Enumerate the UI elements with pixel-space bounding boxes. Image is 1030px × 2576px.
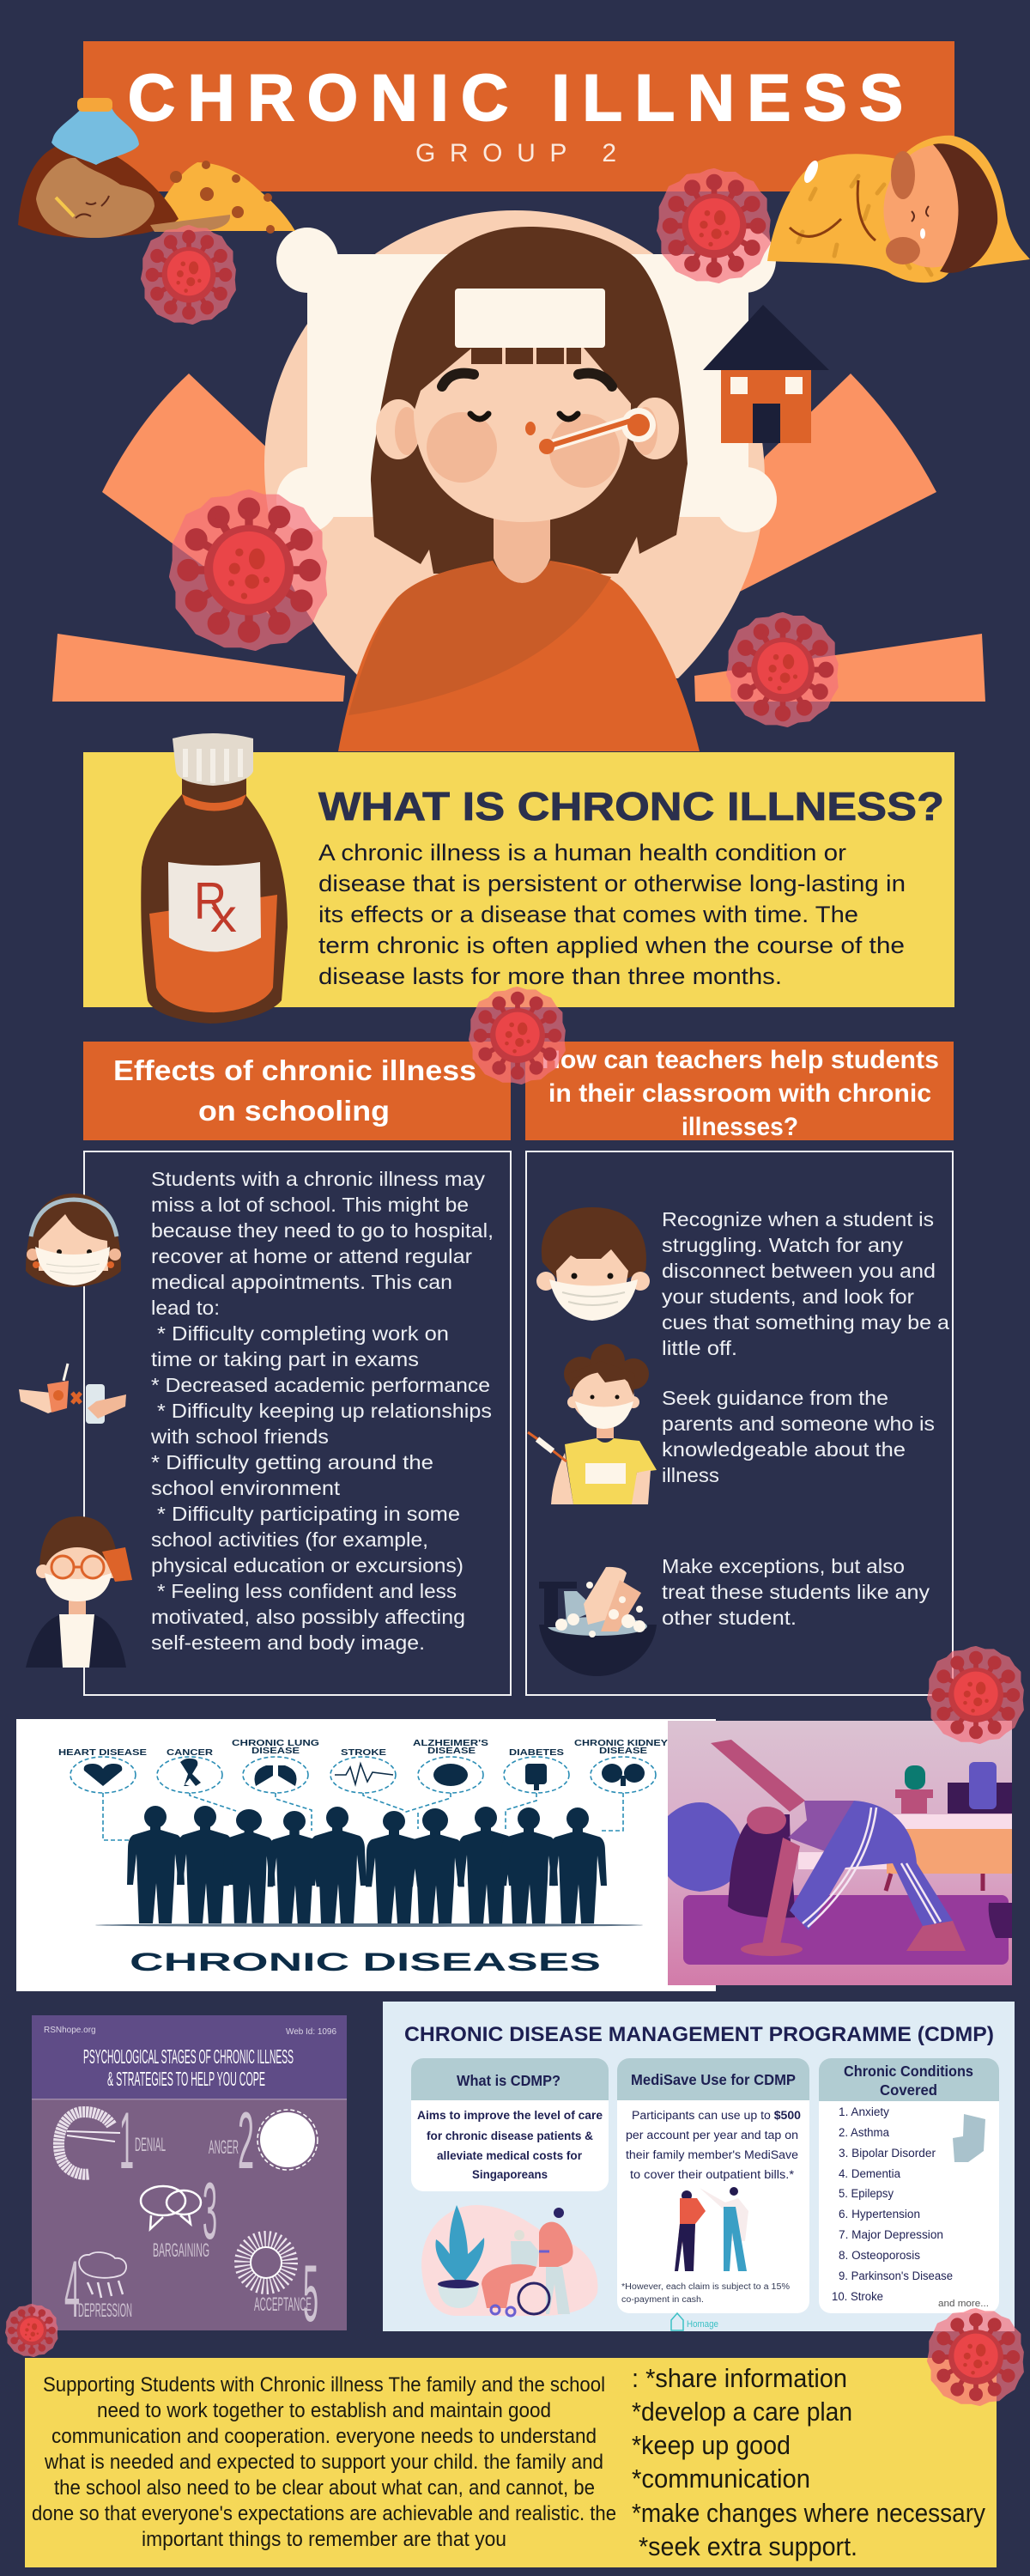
panel: effects text xyxy=(84,1151,511,1695)
card: MediSave use: *However, each claim is subject to a 15% xyxy=(621,2282,790,2292)
panel: effects text: * Difficulty keeping up relationships xyxy=(157,1400,492,1422)
stage numerals: 4 xyxy=(64,2244,80,2334)
heading: WHAT IS CHRONC ILLNESS? xyxy=(318,784,944,829)
stage numerals: 3 xyxy=(203,2166,217,2256)
heading: effects on schooling: Effects of chronic illness xyxy=(113,1054,476,1086)
card: chronic conditions covered: 7. Major Depression xyxy=(839,2228,943,2241)
panel: effects text: * Difficulty completing work on xyxy=(157,1322,449,1345)
disease labels: ALZHEIMER'S xyxy=(413,1738,488,1748)
card: MediSave use: Participants can use up to $500 xyxy=(632,2109,801,2122)
heading: how can teachers help: How can teachers help students xyxy=(542,1046,939,1074)
panel: effects text: lead to: xyxy=(151,1297,220,1319)
icon: child under blanket xyxy=(767,135,1030,283)
supporting text xyxy=(32,2373,616,2551)
illustration: psychological stages of chronic illness xyxy=(32,2015,347,2338)
panel: effects text: school environment xyxy=(151,1477,341,1499)
card: chronic conditions covered: 1. Anxiety xyxy=(839,2105,889,2118)
definition text: term chronic is often applied when the course of the xyxy=(318,933,905,958)
heading: how can teachers help: in their classroom with chronic xyxy=(548,1079,931,1108)
heading: effects on schooling xyxy=(83,1042,511,1140)
card: MediSave use: co-payment in cash. xyxy=(621,2295,704,2305)
panel: effects text: recover at home or attend regular xyxy=(151,1245,472,1267)
supporting text: communication and cooperation. everyone needs to understand xyxy=(52,2425,597,2448)
illustration: nurse with wheelchair and plant xyxy=(421,2205,598,2316)
face xyxy=(36,158,154,238)
panel: effects text: medical appointments. This can xyxy=(151,1271,452,1293)
panel: effects text: * Decreased academic performance xyxy=(151,1374,490,1396)
panel: teachers text: Recognize when a student is xyxy=(662,1208,934,1230)
card: chronic conditions covered: Covered xyxy=(880,2081,937,2099)
forehead cooling pad xyxy=(455,289,605,348)
hair xyxy=(371,227,688,574)
pillow back xyxy=(264,210,765,678)
panel: effects text: school activities (for example, xyxy=(151,1528,428,1551)
ears xyxy=(376,398,679,459)
source labels: RSNhope.org xyxy=(44,2026,96,2035)
stage names: BARGAINING xyxy=(153,2239,209,2261)
panel: effects text: * Difficulty getting around the xyxy=(151,1451,433,1473)
panel: teachers text: little off. xyxy=(662,1337,737,1359)
icon: sick child with ice bag xyxy=(18,98,295,238)
illustration: psychological stages of chronic illness: & STRATEGIES TO HELP YOU COPE xyxy=(107,2068,265,2090)
thermometer xyxy=(539,408,656,454)
cheeks xyxy=(427,412,620,488)
card: what is CDMP: What is CDMP? xyxy=(457,2072,560,2089)
supporting text: Supporting Students with Chronic illness The family and the school xyxy=(43,2373,605,2397)
illustration: psychological stages of chronic illness: 5 xyxy=(303,2248,318,2338)
subtitle: GROUP 2 xyxy=(415,139,616,167)
card: what is CDMP xyxy=(411,2058,609,2191)
hair xyxy=(18,142,179,238)
card: chronic conditions covered xyxy=(819,2058,999,2313)
illustration: yoga stretch xyxy=(668,1721,1012,1985)
panel: effects text: with school friends xyxy=(150,1425,329,1448)
icon: hand washing xyxy=(539,1567,657,1676)
panel: chronic disease management programme xyxy=(383,2002,1015,2331)
disease labels xyxy=(58,1738,668,1758)
body shadow xyxy=(348,561,611,715)
illustration: psychological stages of chronic illness: PSYCHOLOGICAL STAGES OF CHRONIC ILLNESS xyxy=(83,2045,294,2068)
disease labels: CHRONIC KIDNEY xyxy=(574,1738,668,1748)
panel: effects text: because they need to go to hospital, xyxy=(151,1219,494,1242)
things to remember list xyxy=(632,2363,985,2561)
card: MediSave use xyxy=(617,2058,809,2313)
card: MediSave use: their family member's MediSave xyxy=(626,2148,798,2161)
icon: sun xyxy=(243,2239,289,2286)
panel: teachers text: knowledgeable about the xyxy=(662,1438,906,1461)
stage names: DENIAL xyxy=(135,2134,166,2155)
panel: what is chronic illness xyxy=(83,752,954,1007)
disease labels: CHRONIC LUNG xyxy=(232,1738,319,1748)
card: MediSave use: per account per year and tap on xyxy=(626,2129,798,2142)
panel: chronic diseases image xyxy=(16,1719,716,1991)
supporting text: the school also need to be clear about what can, and cannot, be xyxy=(54,2476,595,2500)
illustration: patient and doctor xyxy=(675,2187,748,2271)
card: chronic conditions covered: and more... xyxy=(938,2299,989,2309)
stage numerals: 2 xyxy=(238,2095,254,2185)
card: chronic conditions covered: 3. Bipolar Disorder xyxy=(839,2147,936,2160)
panel: teachers text: your students, and look for xyxy=(662,1285,914,1308)
card: MediSave use: MediSave Use for CDMP xyxy=(631,2071,796,2088)
panel: effects text: time or taking part in exams xyxy=(151,1348,419,1370)
illustration: sick girl on a pillow xyxy=(52,210,985,751)
nose xyxy=(525,422,536,435)
panel: effects text: motivated, also possibly affecting xyxy=(151,1606,465,1628)
heading: how can teachers help xyxy=(525,1042,954,1141)
disease labels: CANCER xyxy=(167,1747,213,1758)
title: CHRONIC DISEASE MANAGEMENT PROGRAMME (CDMP) xyxy=(404,2023,994,2046)
card: chronic conditions covered: 4. Dementia xyxy=(839,2167,900,2180)
icon: house xyxy=(703,305,829,443)
card: chronic conditions covered: 2. Asthma xyxy=(839,2126,889,2139)
disease labels: STROKE xyxy=(341,1747,386,1758)
supporting text: done so that everyone's expectations are achievable and realistic. the xyxy=(32,2502,616,2525)
stage names: ANGER xyxy=(209,2136,239,2158)
icon: anger scribble xyxy=(258,2110,318,2170)
heading: effects on schooling: on schooling xyxy=(198,1095,390,1127)
eyes xyxy=(470,414,578,419)
definition text: disease that is persistent or otherwise long-lasting in xyxy=(318,871,906,896)
panel: effects text: self-esteem and body image. xyxy=(151,1631,425,1654)
things to remember list: *keep up good xyxy=(632,2430,791,2460)
icon: Rx bottle xyxy=(141,733,288,1024)
face xyxy=(414,348,631,522)
stage names xyxy=(78,2134,312,2321)
card: chronic conditions covered: 10. Stroke xyxy=(832,2290,883,2303)
panel: teachers text xyxy=(526,1151,953,1695)
card: what is CDMP: Aims to improve the level of care xyxy=(417,2109,603,2122)
panel: teachers text: parents and someone who is xyxy=(662,1413,935,1435)
card: chronic conditions covered: 9. Parkinson's Disease xyxy=(839,2269,953,2282)
definition text: its effects or a disease that comes with time. The xyxy=(318,902,858,927)
panel: teachers text: disconnect between you and xyxy=(662,1260,936,1282)
card: what is CDMP: alleviate medical costs for xyxy=(437,2149,583,2162)
card: MediSave use: to cover their outpatient bills.* xyxy=(630,2168,795,2181)
disease labels: DISEASE xyxy=(427,1746,476,1756)
logo: Homage: Homage xyxy=(687,2319,718,2330)
silhouettes of people xyxy=(95,1806,643,1927)
ice bag xyxy=(52,107,139,165)
title banner xyxy=(83,41,954,191)
definition text: A chronic illness is a human health condition or xyxy=(318,840,846,866)
supporting text: need to work together to establish and maintain good xyxy=(97,2399,551,2422)
things to remember list: *seek extra support. xyxy=(639,2531,857,2561)
panel: teachers text: illness xyxy=(662,1464,719,1486)
stage names: DEPRESSION xyxy=(78,2300,132,2321)
icon: boy with mask xyxy=(536,1207,650,1321)
things to remember list: : *share information xyxy=(632,2363,847,2393)
title: CHRONIC ILLNESS xyxy=(128,62,903,135)
panel: effects text: physical education or excursions) xyxy=(151,1554,464,1577)
icon: Rx bottle: x xyxy=(210,890,237,942)
stage numerals xyxy=(64,2095,318,2338)
sun rays xyxy=(52,374,985,702)
dashed circles and connectors xyxy=(70,1757,656,1840)
panel: teachers text: struggling. Watch for any xyxy=(662,1234,904,1256)
disease labels: DISEASE xyxy=(599,1746,647,1756)
eyebrows xyxy=(442,374,612,386)
image title: CHRONIC DISEASES xyxy=(130,1948,601,1977)
icon: hands sharing items xyxy=(19,1364,126,1424)
supporting text: important things to remember are that you xyxy=(142,2528,506,2551)
definition text xyxy=(318,840,906,989)
disease labels: DIABETES xyxy=(509,1747,564,1758)
panel: effects text: miss a lot of school. This might be xyxy=(151,1194,469,1216)
heading: how can teachers help: illnesses? xyxy=(682,1113,798,1141)
panel: teachers text: other student. xyxy=(662,1607,797,1629)
pillow xyxy=(276,228,777,532)
card: what is CDMP: Singaporeans xyxy=(472,2168,548,2181)
card: what is CDMP: for chronic disease patients & xyxy=(427,2129,593,2142)
illustration: psychological stages of chronic illness: Web Id: 1096 xyxy=(286,2027,336,2037)
neck xyxy=(494,515,550,584)
disease labels: HEART DISEASE xyxy=(58,1747,147,1758)
blanket xyxy=(148,162,295,231)
icon: inhaler xyxy=(953,2114,985,2162)
icon: speech bubbles xyxy=(141,2186,201,2229)
icon: Rx bottle: R xyxy=(194,872,227,930)
icon: boy with glasses xyxy=(26,1516,132,1668)
supporting text: what is needed and expected to support your child. the family and xyxy=(44,2451,603,2474)
panel: effects text: * Feeling less confident and less xyxy=(157,1580,457,1602)
panel: teachers text: Seek guidance from the xyxy=(662,1387,888,1409)
icon: blindfolded head xyxy=(58,2112,120,2174)
panel: supporting students xyxy=(25,2358,997,2567)
icon: girl with mask xyxy=(26,1194,121,1287)
body xyxy=(338,561,700,751)
panel: teachers text: cues that something may be a xyxy=(662,1311,949,1334)
stage numerals: 1 xyxy=(119,2095,134,2185)
things to remember list: *make changes where necessary xyxy=(632,2498,985,2528)
card: chronic conditions covered: 6. Hypertension xyxy=(839,2208,920,2221)
disease icons xyxy=(84,1759,645,1790)
things to remember list: *develop a care plan xyxy=(632,2397,852,2427)
card: chronic conditions covered: 8. Osteoporosis xyxy=(839,2249,920,2262)
icon: boy getting vaccine xyxy=(528,1344,657,1504)
panel: effects text: * Difficulty participating in some xyxy=(157,1503,460,1525)
things to remember list: *communication xyxy=(632,2464,810,2494)
disease labels: DISEASE xyxy=(251,1746,300,1756)
panel: teachers text: Make exceptions, but also xyxy=(662,1555,905,1577)
logo: Homage xyxy=(671,2313,718,2330)
card: chronic conditions covered: Chronic Conditions xyxy=(844,2063,973,2080)
card: chronic conditions covered: 5. Epilepsy xyxy=(839,2187,894,2200)
fringe xyxy=(471,348,581,364)
definition text: disease lasts for more than three months. xyxy=(318,963,782,989)
illustration: psychological stages of chronic illness: ACCEPTANCE xyxy=(254,2293,312,2315)
panel: teachers text: treat these students like any xyxy=(662,1581,930,1603)
icon: rain cloud xyxy=(79,2252,126,2298)
panel: effects text: Students with a chronic illness may xyxy=(151,1168,486,1190)
